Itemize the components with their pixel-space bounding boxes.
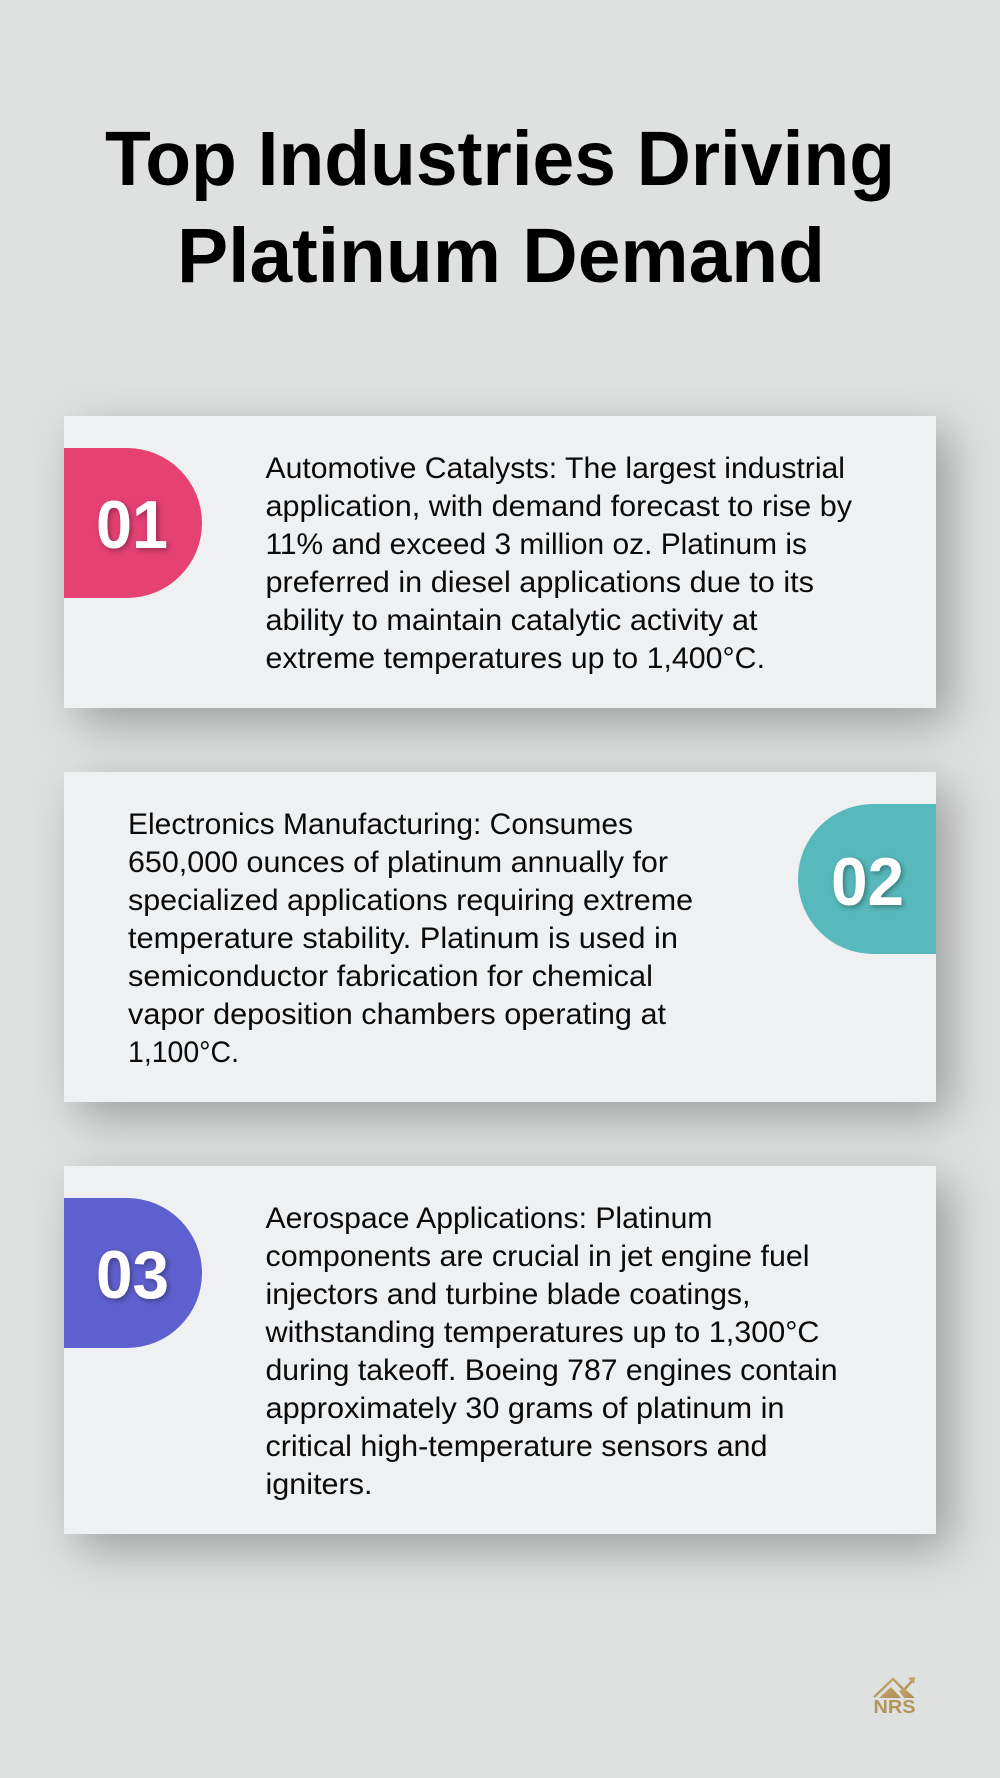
text block: 1,100°C. bbox=[128, 1036, 239, 1069]
number badge 02: 02 bbox=[831, 844, 904, 920]
text block: specialized applications requiring extreme bbox=[128, 884, 693, 917]
text block: igniters. bbox=[266, 1468, 372, 1501]
title: Top Industries Driving bbox=[105, 116, 895, 202]
title bbox=[105, 116, 895, 299]
number badge 03 bbox=[64, 1198, 202, 1348]
icon: NRS logo bbox=[874, 1677, 916, 1717]
title: Platinum Demand bbox=[177, 213, 825, 299]
card background bbox=[64, 772, 936, 1102]
text block: temperature stability. Platinum is used in bbox=[128, 922, 678, 955]
number badge 03: 03 bbox=[96, 1237, 169, 1313]
panel: aerospace applications bbox=[64, 1166, 936, 1534]
text block bbox=[264, 1202, 838, 1501]
number badge 01 bbox=[64, 448, 202, 598]
panel: electronics manufacturing bbox=[64, 772, 936, 1102]
text block: Electronics Manufacturing: Consumes bbox=[128, 808, 633, 841]
text block: extreme temperatures up to 1,400°C. bbox=[266, 642, 765, 675]
text block: ability to maintain catalytic activity at bbox=[266, 604, 758, 637]
text block: critical high-temperature sensors and bbox=[266, 1430, 768, 1463]
text block: Automotive Catalysts: The largest industrial bbox=[266, 452, 845, 485]
text block: approximately 30 grams of platinum in bbox=[266, 1392, 784, 1425]
number badge 02 bbox=[798, 804, 936, 954]
panel: automotive catalysts bbox=[64, 416, 936, 708]
text block: during takeoff. Boeing 787 engines contain bbox=[266, 1354, 838, 1387]
text block: preferred in diesel applications due to its bbox=[266, 566, 814, 599]
icon: NRS logo: NRS bbox=[874, 1697, 916, 1717]
number badge 01: 01 bbox=[96, 487, 168, 563]
card background bbox=[64, 416, 936, 708]
text block bbox=[266, 452, 852, 675]
text block: 11% and exceed 3 million oz. Platinum is bbox=[266, 528, 807, 561]
text block: vapor deposition chambers operating at bbox=[128, 998, 667, 1031]
text block: semiconductor fabrication for chemical bbox=[128, 960, 653, 993]
text block: 650,000 ounces of platinum annually for bbox=[128, 846, 668, 879]
text block bbox=[128, 808, 693, 1069]
text block: application, with demand forecast to rise by bbox=[266, 490, 852, 523]
text block: components are crucial in jet engine fuel bbox=[266, 1240, 810, 1273]
text block: Aerospace Applications: Platinum bbox=[266, 1202, 712, 1235]
card background bbox=[64, 1166, 936, 1534]
text block: injectors and turbine blade coatings, bbox=[266, 1278, 750, 1311]
text block: withstanding temperatures up to 1,300°C bbox=[264, 1316, 820, 1349]
